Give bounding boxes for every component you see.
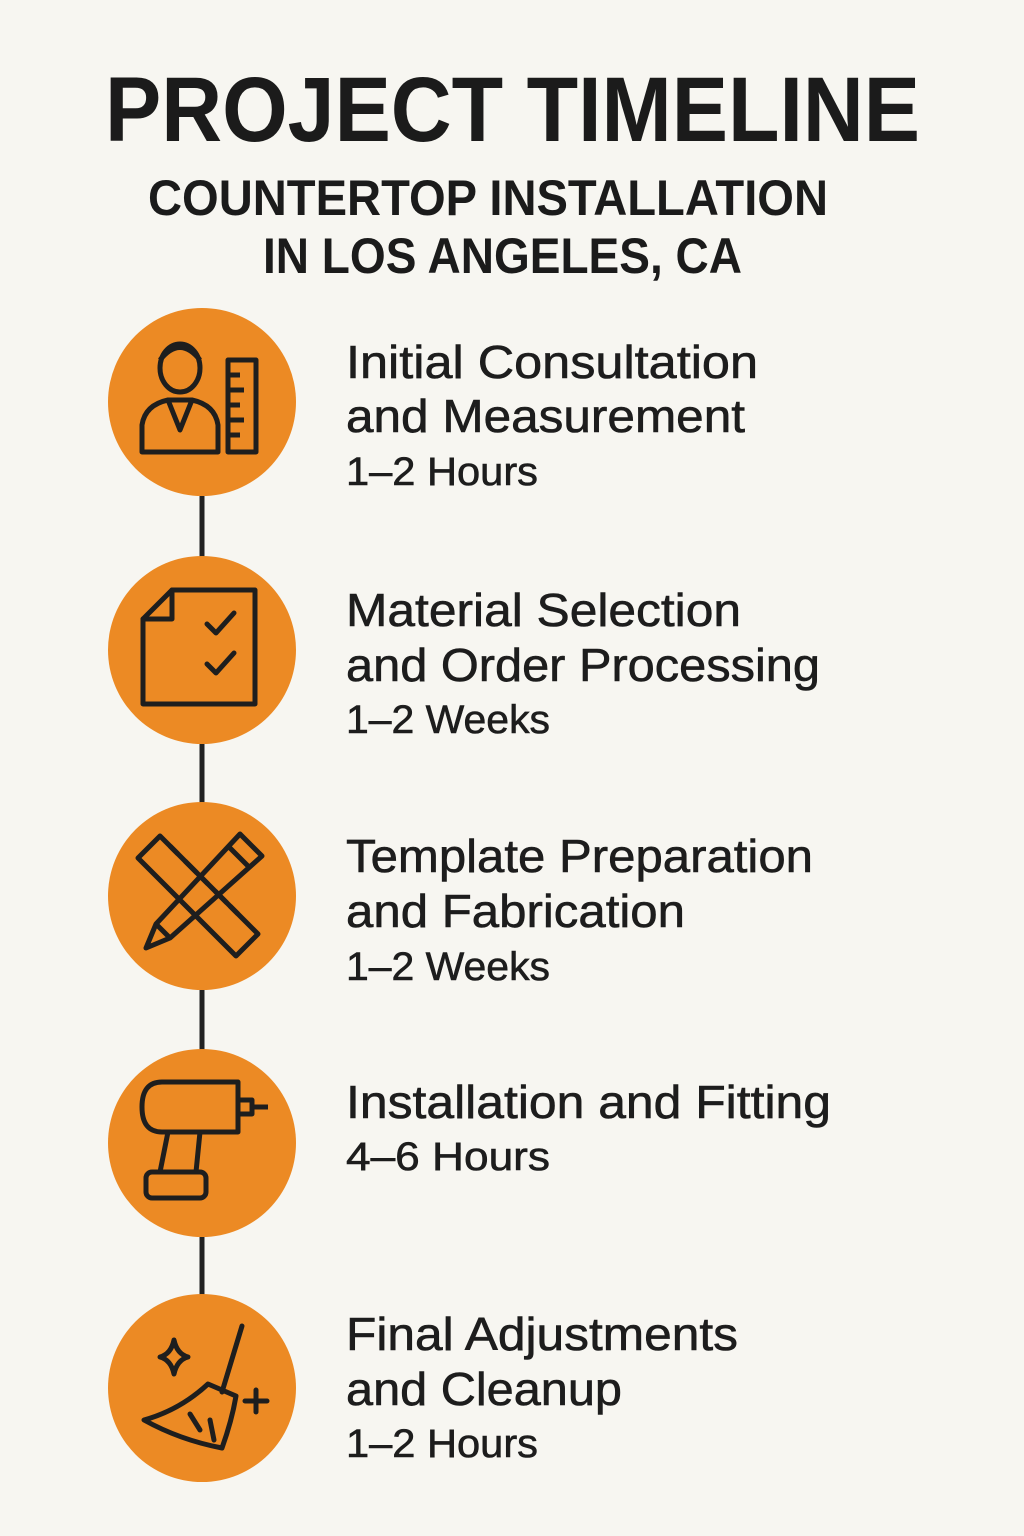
icon: checklist document [108,556,296,744]
connector line [200,402,204,1388]
text: step 5 [346,1308,738,1466]
text: step 1 [346,336,758,494]
text: step 3: 1–2 Weeks [346,945,550,989]
text: step 4: Installation and Fitting [346,1076,831,1128]
text: step 3 [346,830,813,989]
text: step 5: and Cleanup [346,1363,622,1415]
icon: drill [108,1049,296,1237]
text: step 4: 4–6 Hours [346,1135,550,1179]
icon: broom with sparkles [108,1294,296,1482]
subtitle: COUNTERTOP INSTALLATION [148,170,828,226]
subtitle: IN LOS ANGELES, CA [263,228,742,284]
title: PROJECT TIMELINE [105,59,920,161]
text: step 4 [346,1076,831,1179]
step 2 [108,556,820,744]
subtitle [148,170,828,284]
text: step 1: Initial Consultation [346,336,758,388]
icon: ruler and pencil [108,802,296,990]
step 1 [108,308,758,496]
step 4 [108,1049,831,1237]
text: step 2 [346,584,820,742]
text: step 2: 1–2 Weeks [346,698,550,742]
step 3 [108,802,813,990]
text: step 3: and Fabrication [346,885,685,937]
text: step 2: and Order Processing [346,639,820,691]
text: step 5: Final Adjustments [346,1308,738,1360]
text: step 5: 1–2 Hours [346,1422,538,1466]
text: step 3: Template Preparation [346,830,813,882]
text: step 1: 1–2 Hours [346,450,538,494]
text: step 1: and Measurement [346,390,745,442]
icon: consultant with ruler [108,308,296,496]
text: step 2: Material Selection [346,584,741,636]
step 5 [108,1294,738,1482]
